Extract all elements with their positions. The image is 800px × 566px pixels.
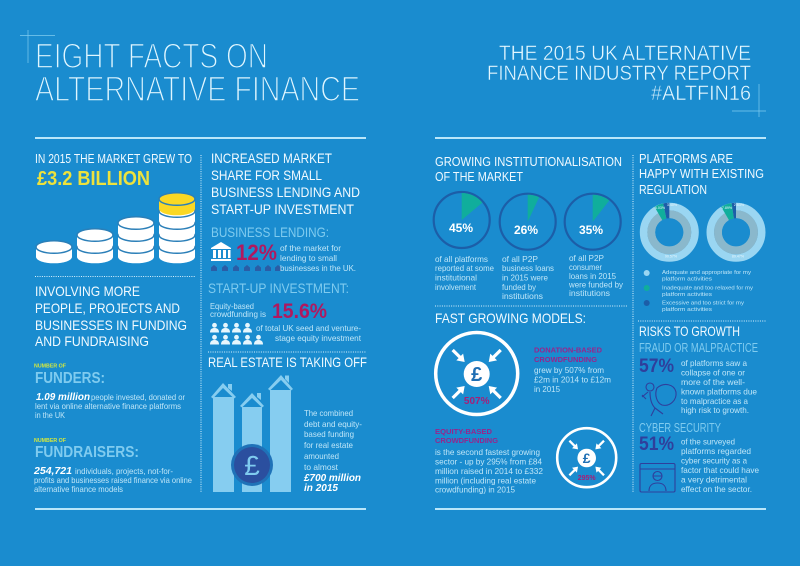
stat: funders: people invested, donated or xyxy=(91,393,185,402)
legend: platform activities xyxy=(662,307,712,313)
report title: THE 2015 UK ALTERNATIVE xyxy=(499,42,751,65)
text: equity-based crowdfunding: EQUITY-BASED xyxy=(435,427,493,436)
text: donation-based crowdfunding: grew by 507% from xyxy=(534,366,604,375)
icon: donation circle: £ xyxy=(471,364,482,386)
heading: institutionalisation: GROWING INSTITUTIONALISATION xyxy=(435,154,622,169)
text: real estate funding: for real estate xyxy=(304,441,353,450)
text: donation-based crowdfunding: in 2015 xyxy=(534,385,560,394)
stat: fundraisers: individuals, projects, not-for- xyxy=(75,467,173,476)
panel: risks to growth xyxy=(639,323,759,494)
report title: #ALTFIN16 xyxy=(651,82,751,105)
panel: institutionalisation xyxy=(434,154,624,301)
text: fraud: to malpractice as a xyxy=(681,397,748,406)
title: ALTERNATIVE FINANCE xyxy=(35,70,360,109)
heading: increased market share: INCREASED MARKET xyxy=(211,150,332,166)
panel: market growth xyxy=(35,151,195,263)
panel: increased market share xyxy=(208,150,362,344)
text: platforms caption: involvement xyxy=(435,283,477,292)
report title: FINANCE INDUSTRY REPORT xyxy=(487,62,751,85)
heading: increased market share xyxy=(211,150,360,217)
text: donation-based crowdfunding: £2m in 2014 to £12m xyxy=(534,376,611,384)
legend xyxy=(644,270,753,313)
icon: equity circle: £ xyxy=(583,450,591,466)
stat: funders: 1.09 million xyxy=(36,391,90,403)
text: business loans caption xyxy=(502,255,554,301)
text: real estate funding: to almost xyxy=(304,463,339,472)
panel: involving more people xyxy=(33,283,192,494)
subheading: start-up investment: START-UP INVESTMENT: xyxy=(208,280,349,296)
icon: people xyxy=(210,323,263,344)
legend: Inadequate and too relaxed for my xyxy=(662,286,753,292)
text: real estate funding xyxy=(303,409,362,494)
heading: institutionalisation: OF THE MARKET xyxy=(435,169,523,184)
text: lending share: businesses in the UK. xyxy=(280,264,356,273)
text: equity-based crowdfunding xyxy=(210,302,266,319)
chart: donut two: 7.89% xyxy=(722,206,733,210)
text: consumer loans caption: institutions xyxy=(569,289,610,298)
panel: fast growing models xyxy=(435,310,616,494)
text: platforms caption: reported at some xyxy=(435,264,494,273)
text: donation-based crowdfunding xyxy=(534,346,611,394)
text: equity-based crowdfunding: crowdfunding is xyxy=(210,310,266,319)
stat: funders xyxy=(34,364,185,420)
chart: 35 percent: 35% xyxy=(579,223,603,237)
text: business loans caption: funded by xyxy=(502,283,537,292)
text: equity investment share: of total UK seed and venture- xyxy=(256,324,361,333)
legend: platform activities xyxy=(662,276,712,282)
heading: involving more people: AND FUNDRAISING xyxy=(35,333,149,349)
text: real estate funding: £700 million xyxy=(303,472,361,484)
icon: donation circle: 507% xyxy=(464,396,490,407)
stat: funders: FUNDERS: xyxy=(35,370,105,387)
text: donation-based crowdfunding: CROWDFUNDING xyxy=(534,355,597,364)
text: equity-based crowdfunding: is the second fastest growing xyxy=(435,448,540,457)
chart: 45 percent xyxy=(434,192,490,248)
text: fraud: collapse of one or xyxy=(681,368,745,378)
text: equity-based crowdfunding: million (including real estate xyxy=(435,476,536,486)
text: consumer loans caption: loans in 2015 xyxy=(569,272,616,281)
text: equity-based crowdfunding: million raised in 2014 to £332 xyxy=(435,467,543,476)
chart: donut two: 89.47% xyxy=(732,254,745,258)
chart: donut two: 2.63% xyxy=(734,203,745,207)
chart: donut one xyxy=(644,203,695,258)
icon: hacker in browser window xyxy=(640,464,675,492)
legend: Excessive and too strict for my xyxy=(662,301,744,307)
heading: involving more people xyxy=(35,283,187,349)
subheading: business lending: BUSINESS LENDING: xyxy=(211,224,329,240)
legend: Adequate and appropriate for my xyxy=(662,270,751,276)
figure: 12 percent: 12% xyxy=(236,240,277,265)
stat: fundraisers: 254,721 xyxy=(33,465,72,477)
chart: 26 percent: 26% xyxy=(514,223,538,237)
heading: increased market share: SHARE FOR SMALL xyxy=(211,167,322,183)
icon: donation circle xyxy=(436,332,518,414)
text: equity-based crowdfunding: sector - up by 295% from £84 xyxy=(435,458,542,466)
heading: market growth: IN 2015 THE MARKET GREW TO xyxy=(35,151,192,166)
text: consumer loans caption: of all P2P xyxy=(569,254,605,263)
text: cyber security xyxy=(681,438,759,494)
text: platforms caption: institutional xyxy=(435,274,477,282)
stat: fundraisers: alternative finance models xyxy=(34,485,123,494)
stat: funders: in the UK xyxy=(35,411,65,420)
stat: funders: NUMBER OF xyxy=(34,364,66,370)
stat: fundraisers xyxy=(33,438,192,494)
title xyxy=(35,37,360,109)
subheading: fraud: FRAUD OR MALPRACTICE xyxy=(639,341,758,355)
text: fraud: high risk to growth. xyxy=(681,406,749,415)
text: real estate funding: The combined xyxy=(304,409,353,418)
text: equity-based crowdfunding: crowdfunding) in 2015 xyxy=(435,486,515,494)
text: consumer loans caption: were funded by xyxy=(568,280,624,290)
heading: real estate: REAL ESTATE IS TAKING OFF xyxy=(208,354,367,370)
icon: rising house arrows xyxy=(211,375,293,492)
chart: donut two xyxy=(710,203,762,258)
heading: fast growing models: FAST GROWING MODELS: xyxy=(435,310,586,326)
figure: 57 percent: 57% xyxy=(639,356,674,377)
text: fraud xyxy=(681,359,757,415)
icon: thief with sack xyxy=(642,383,676,416)
legend: platform activities xyxy=(662,292,712,298)
stat: fundraisers: FUNDRAISERS: xyxy=(35,444,139,461)
chart: donut one: 3.40% xyxy=(667,203,678,207)
heading: risks to growth: RISKS TO GROWTH xyxy=(639,323,740,339)
chart: 35 percent xyxy=(565,194,621,250)
text: lending share xyxy=(280,244,356,273)
text: equity-based crowdfunding: Equity-based xyxy=(210,302,254,311)
text: cyber security: factor that could have xyxy=(681,466,759,475)
title: EIGHT FACTS ON xyxy=(35,37,268,76)
heading: regulation: REGULATION xyxy=(639,182,707,197)
text: real estate funding: debt and equity- xyxy=(304,420,362,429)
heading: increased market share: START-UP INVESTMENT xyxy=(211,201,354,217)
text: donation-based crowdfunding: DONATION-BASED xyxy=(534,346,603,354)
text: equity-based crowdfunding xyxy=(435,427,543,494)
text: consumer loans caption xyxy=(568,254,624,298)
text: platforms caption xyxy=(435,255,494,292)
text: real estate funding: amounted xyxy=(304,452,339,461)
text: cyber security: platforms regarded xyxy=(681,447,751,456)
figure: 3.2 billion: £3.2 BILLION xyxy=(37,168,150,190)
subheading: cyber security: CYBER SECURITY xyxy=(639,421,721,435)
icon: bank xyxy=(211,242,231,261)
text: business loans caption: institutions xyxy=(502,292,543,301)
icon: pound coin: £ xyxy=(244,450,260,481)
heading: involving more people: BUSINESSES IN FUNDING xyxy=(35,317,187,333)
text: business loans caption: of all P2P xyxy=(502,255,539,264)
heading: increased market share: BUSINESS LENDING AND xyxy=(211,184,360,200)
heading: regulation: PLATFORMS ARE xyxy=(639,151,733,166)
text: cyber security: of the surveyed xyxy=(681,438,735,446)
chart: donut one: 90.57% xyxy=(665,254,678,258)
heading: involving more people: INVOLVING MORE xyxy=(35,283,140,299)
icon: pound coin xyxy=(231,444,273,486)
panel: regulation xyxy=(639,151,764,313)
stat: fundraisers: profits and businesses raised finance via online xyxy=(34,476,192,485)
text: business loans caption: in 2015 were xyxy=(502,274,548,282)
text: business loans caption: business loans xyxy=(502,264,554,273)
heading: institutionalisation xyxy=(435,154,622,184)
text: cyber security: cyber security as a xyxy=(681,456,747,466)
text: lending share: lending to small xyxy=(280,254,337,263)
stat: fundraisers: NUMBER OF xyxy=(34,438,66,444)
icon: row of small banks xyxy=(211,265,281,271)
heading: regulation: HAPPY WITH EXISTING xyxy=(639,166,764,181)
text: consumer loans caption: consumer xyxy=(569,263,602,272)
chart: donut one: 6.03% xyxy=(655,206,666,210)
text: fraud: more of the well- xyxy=(681,378,745,387)
text: equity investment share xyxy=(256,324,362,343)
chart: 26 percent xyxy=(500,194,556,250)
stat: funders: lent via online alternative finance platforms xyxy=(35,402,181,411)
text: equity investment share: stage equity investment xyxy=(275,334,362,343)
report title xyxy=(487,42,751,105)
text: equity-based crowdfunding: CROWDFUNDING xyxy=(435,436,498,445)
text: platforms caption: of all platforms xyxy=(435,255,488,264)
icon: equity circle xyxy=(557,428,616,487)
figure: 15.6 percent: 15.6% xyxy=(272,300,327,323)
text: real estate funding: based funding xyxy=(304,430,354,439)
panel: real estate xyxy=(208,354,367,494)
icon: coin stacks xyxy=(36,193,195,263)
text: cyber security: effect on the sector. xyxy=(681,485,752,494)
figure: 51 percent: 51% xyxy=(639,434,674,455)
text: cyber security: a very detrimental xyxy=(681,476,747,484)
heading: regulation xyxy=(639,151,764,197)
icon: equity circle: 295% xyxy=(578,475,596,482)
chart: 45 percent: 45% xyxy=(449,221,473,235)
text: fraud: known platforms due xyxy=(681,388,757,396)
text: lending share: of the market for xyxy=(280,244,341,253)
text: real estate funding: in 2015 xyxy=(304,482,338,494)
text: fraud: of platforms saw a xyxy=(681,359,747,368)
heading: involving more people: PEOPLE, PROJECTS AND xyxy=(35,300,180,316)
